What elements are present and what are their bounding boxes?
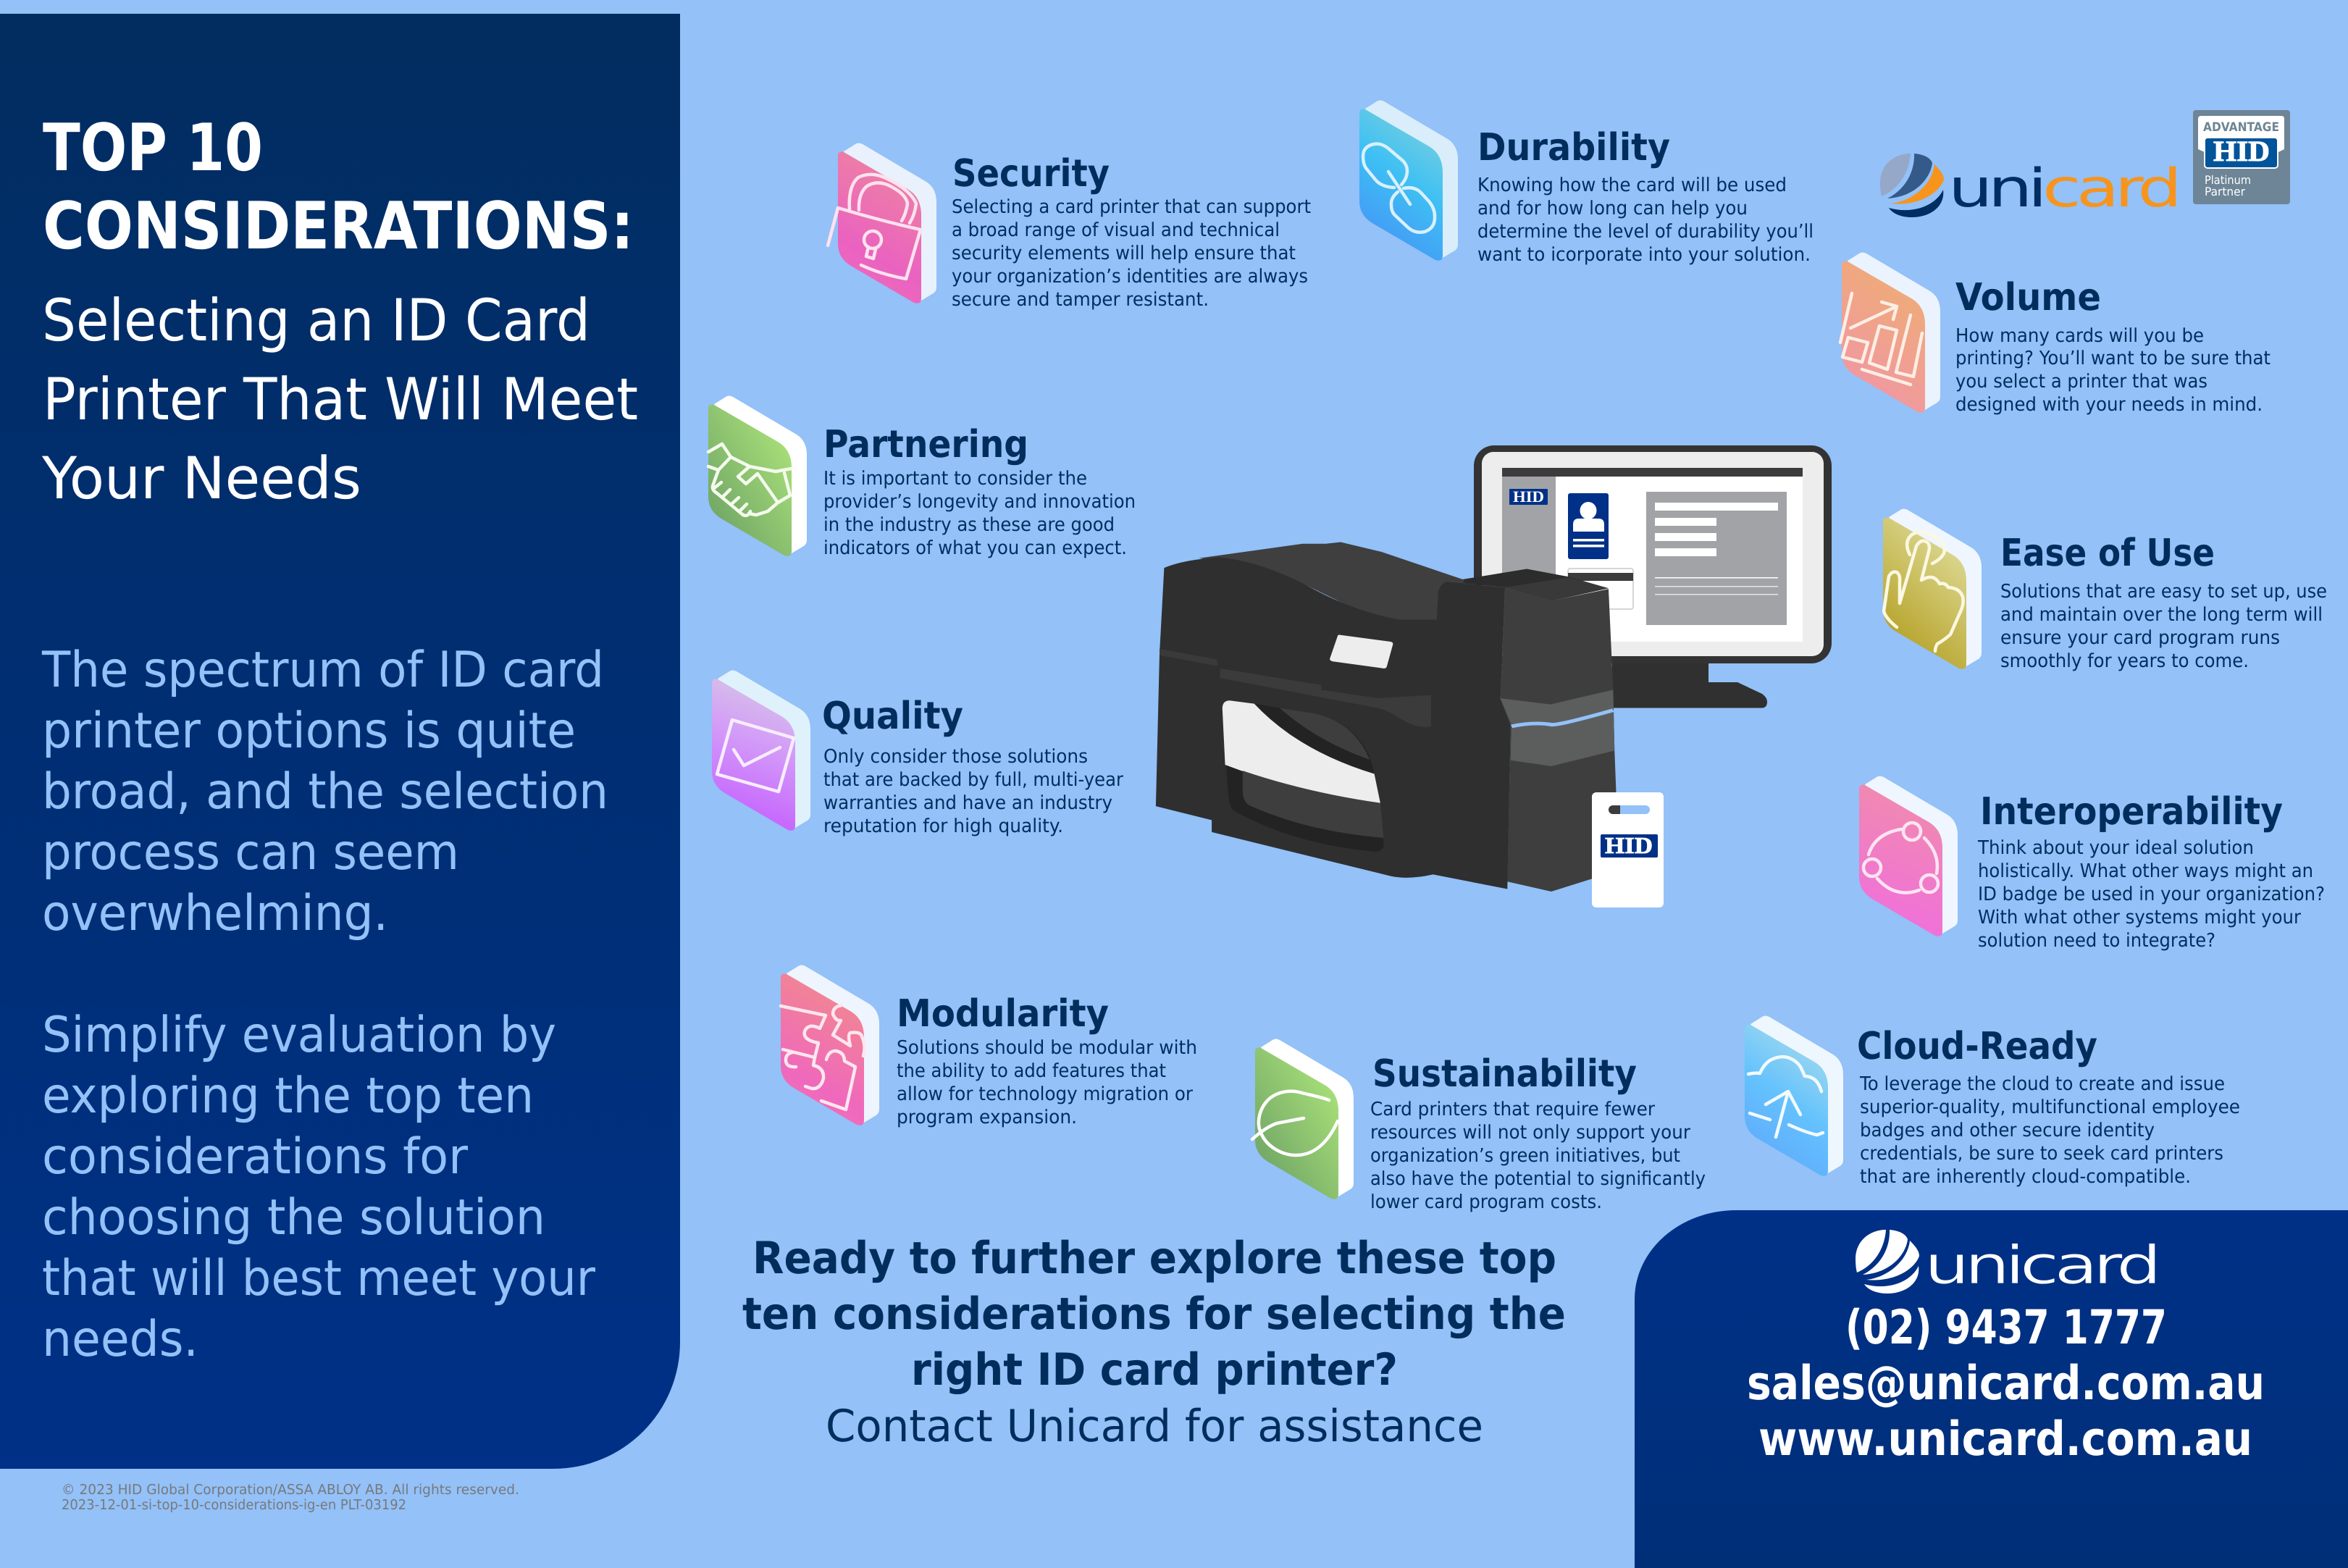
call to action: Ready to further explore these top	[752, 1233, 1556, 1284]
icon: sustainability leaf	[1252, 1039, 1354, 1199]
heading and text: ease of use	[2000, 532, 2327, 672]
badge: HID advantage platinum partner: Partner	[2205, 185, 2245, 198]
heading and text: volume: Volume	[1955, 276, 2101, 319]
heading and text: sustainability: lower card program costs.	[1370, 1191, 1602, 1213]
ID card on screen	[1568, 493, 1609, 559]
heading and text: security: a broad range of visual and technical	[952, 219, 1280, 241]
intro paragraph 2: Simplify evaluation by	[42, 1007, 556, 1064]
heading and text: modularity: the ability to add features that	[897, 1060, 1166, 1082]
intro paragraph 2: choosing the solution	[42, 1189, 545, 1246]
heading and text: durability: Knowing how the card will be used	[1477, 175, 1787, 196]
heading and text: sustainability: Sustainability	[1372, 1052, 1637, 1096]
heading and text: sustainability: organization’s green initiatives, but	[1370, 1145, 1680, 1167]
heading and text: cloud-ready: credentials, be sure to seek card printers	[1860, 1143, 2223, 1165]
icon: partnering handshake	[708, 395, 807, 556]
badge: HID advantage platinum partner: HID	[2213, 135, 2270, 167]
title: TOP 10	[43, 110, 263, 186]
heading and text: sustainability: Card printers that require fewer	[1370, 1099, 1655, 1120]
icon: modularity puzzle	[781, 965, 879, 1125]
panel: left intro	[0, 14, 680, 1469]
heading and text: interoperability: Interoperability	[1980, 790, 2283, 834]
intro paragraph 2: considerations for	[42, 1128, 468, 1186]
call to action: right ID card printer?	[911, 1344, 1398, 1396]
icon: security padlock	[828, 143, 936, 303]
heading and text: durability: want to icorporate into your solution.	[1477, 244, 1811, 266]
logo swirl white	[1856, 1230, 1919, 1294]
heading and text: ease of use: ensure your card program runs	[2000, 627, 2280, 649]
icon: interoperability circle nodes	[1859, 776, 1958, 936]
heading and text: ease of use: Ease of Use	[2000, 532, 2215, 575]
heading and text: interoperability: With what other systems might your	[1978, 907, 2301, 928]
intro paragraph 1: The spectrum of ID card	[41, 642, 604, 699]
heading and text: partnering: It is important to consider the	[823, 468, 1087, 490]
heading and text: ease of use: and maintain over the long term will	[2000, 604, 2323, 626]
heading and text: interoperability: ID badge be used in your organization?	[1978, 884, 2325, 905]
heading and text: quality: reputation for high quality.	[823, 816, 1063, 837]
illustration: monitor	[1474, 445, 1832, 708]
contact website: www.unicard.com.au	[1758, 1412, 2252, 1467]
heading and text: cloud-ready: Cloud-Ready	[1857, 1025, 2097, 1068]
subtitle: Printer That Will Meet	[43, 366, 638, 433]
heading and text: sustainability: resources will not only support your	[1370, 1122, 1690, 1144]
heading and text: durability: Durability	[1477, 126, 1670, 169]
heading and text: interoperability: solution need to integrate?	[1978, 930, 2215, 952]
heading and text: volume: printing? You’ll want to be sure that	[1955, 348, 2271, 369]
badge: HID advantage platinum partner: Platinum	[2205, 173, 2251, 187]
heading and text: quality	[822, 695, 1123, 837]
heading and text: cloud-ready: that are inherently cloud-compatible.	[1860, 1166, 2191, 1188]
footnote	[62, 1482, 519, 1513]
heading and text: security: your organization’s identities are always	[952, 266, 1308, 288]
subtitle: Your Needs	[41, 445, 361, 512]
heading and text: quality: warranties and have an industry	[823, 792, 1112, 814]
logo: unicard: unicard	[1948, 158, 2177, 219]
logo swirl	[1880, 154, 1944, 217]
heading and text: cloud-ready: superior-quality, multifunctional employee	[1860, 1097, 2240, 1118]
heading and text: modularity	[897, 992, 1197, 1128]
heading and text: security: security elements will help ensure that	[952, 243, 1296, 264]
heading and text: security: Selecting a card printer that can support	[952, 196, 1311, 218]
call to action	[742, 1233, 1566, 1452]
subtitle: Selecting an ID Card	[42, 287, 590, 354]
call to action: Contact Unicard for assistance	[826, 1401, 1483, 1452]
footnote: © 2023 HID Global Corporation/ASSA ABLOY AB. All rights reserved.	[62, 1482, 519, 1498]
form panel on screen	[1646, 492, 1787, 625]
intro paragraph 1: printer options is quite	[42, 703, 576, 760]
heading and text: partnering	[823, 423, 1136, 559]
heading and text: partnering: Partnering	[823, 423, 1028, 466]
heading and text: sustainability: also have the potential to significantly	[1370, 1168, 1706, 1190]
icon: durability chain link	[1359, 100, 1458, 261]
heading and text: ease of use: Solutions that are easy to set up, use	[2000, 581, 2327, 603]
contact phone: (02) 9437 1777	[1845, 1301, 2167, 1355]
heading and text: cloud-ready: To leverage the cloud to create and issue	[1859, 1073, 2225, 1095]
call to action: ten considerations for selecting the	[742, 1288, 1566, 1340]
heading and text: quality: Quality	[822, 695, 963, 738]
intro paragraph 1: process can seem	[42, 824, 459, 881]
badge: HID advantage platinum partner: ADVANTAGE	[2203, 120, 2279, 135]
heading and text: cloud-ready	[1857, 1025, 2240, 1188]
heading and text: modularity: allow for technology migration or	[897, 1083, 1193, 1105]
icon: cloud upload	[1745, 1015, 1843, 1176]
heading and text: quality: that are backed by full, multi-year	[823, 769, 1123, 791]
heading and text: volume: you select a printer that was	[1955, 371, 2207, 393]
intro paragraph 1: overwhelming.	[42, 885, 388, 942]
heading and text: partnering: indicators of what you can expect.	[823, 537, 1127, 559]
illustration: HID ID badge	[1592, 792, 1664, 907]
heading and text: volume: How many cards will you be	[1955, 325, 2204, 347]
intro paragraph 2: exploring the top ten	[42, 1068, 534, 1125]
heading and text: sustainability	[1370, 1052, 1706, 1213]
intro paragraph 1: broad, and the selection	[42, 763, 608, 821]
heading and text: volume: designed with your needs in mind.	[1955, 394, 2263, 416]
contact email: sales@unicard.com.au	[1747, 1357, 2265, 1411]
heading and text: durability	[1477, 126, 1814, 266]
heading and text: partnering: in the industry as these are good	[823, 514, 1115, 536]
badge: HID advantage platinum partner	[2193, 110, 2290, 204]
intro paragraph 2: needs.	[42, 1311, 198, 1368]
heading and text: security: Security	[952, 152, 1110, 196]
heading and text: security: secure and tamper resistant.	[952, 289, 1209, 311]
logo: white unicard: unicard	[1924, 1235, 2157, 1296]
heading and text: durability: determine the level of durability you’ll	[1477, 221, 1814, 243]
heading and text: interoperability: Think about your ideal solution	[1977, 837, 2254, 859]
heading and text: durability: and for how long can help you	[1477, 198, 1748, 219]
icon: quality check box	[712, 671, 810, 831]
HID screen logo: HID	[1513, 487, 1544, 506]
heading and text: modularity: program expansion.	[897, 1107, 1077, 1128]
subtitle	[41, 287, 638, 512]
heading and text: ease of use: smoothly for years to come.	[2000, 650, 2249, 672]
heading and text: quality: Only consider those solutions	[823, 746, 1088, 768]
intro paragraph 1	[41, 642, 608, 942]
footnote: 2023-12-01-si-top-10-considerations-ig-en PLT-03192	[62, 1497, 406, 1513]
heading and text: security	[952, 152, 1311, 311]
intro paragraph 2	[42, 1007, 595, 1368]
intro paragraph 2: that will best meet your	[42, 1250, 595, 1307]
heading and text: interoperability: holistically. What other ways might an	[1978, 860, 2313, 882]
title: CONSIDERATIONS:	[43, 188, 634, 264]
heading and text: volume	[1955, 276, 2271, 416]
illustration: ID card printer	[1156, 542, 1619, 892]
heading and text: modularity: Solutions should be modular with	[897, 1037, 1197, 1059]
panel: contact	[1635, 1210, 2348, 1568]
heading and text: partnering: provider’s longevity and innovation	[823, 491, 1136, 513]
heading and text: modularity: Modularity	[897, 992, 1109, 1036]
title	[43, 110, 634, 264]
heading and text: cloud-ready: badges and other secure identity	[1860, 1120, 2155, 1141]
icon: ease of use pointing hand	[1883, 508, 1982, 669]
icon: volume bar chart	[1840, 252, 1940, 413]
heading and text: interoperability	[1977, 790, 2325, 952]
illustration: HID ID badge: HID	[1605, 832, 1653, 858]
